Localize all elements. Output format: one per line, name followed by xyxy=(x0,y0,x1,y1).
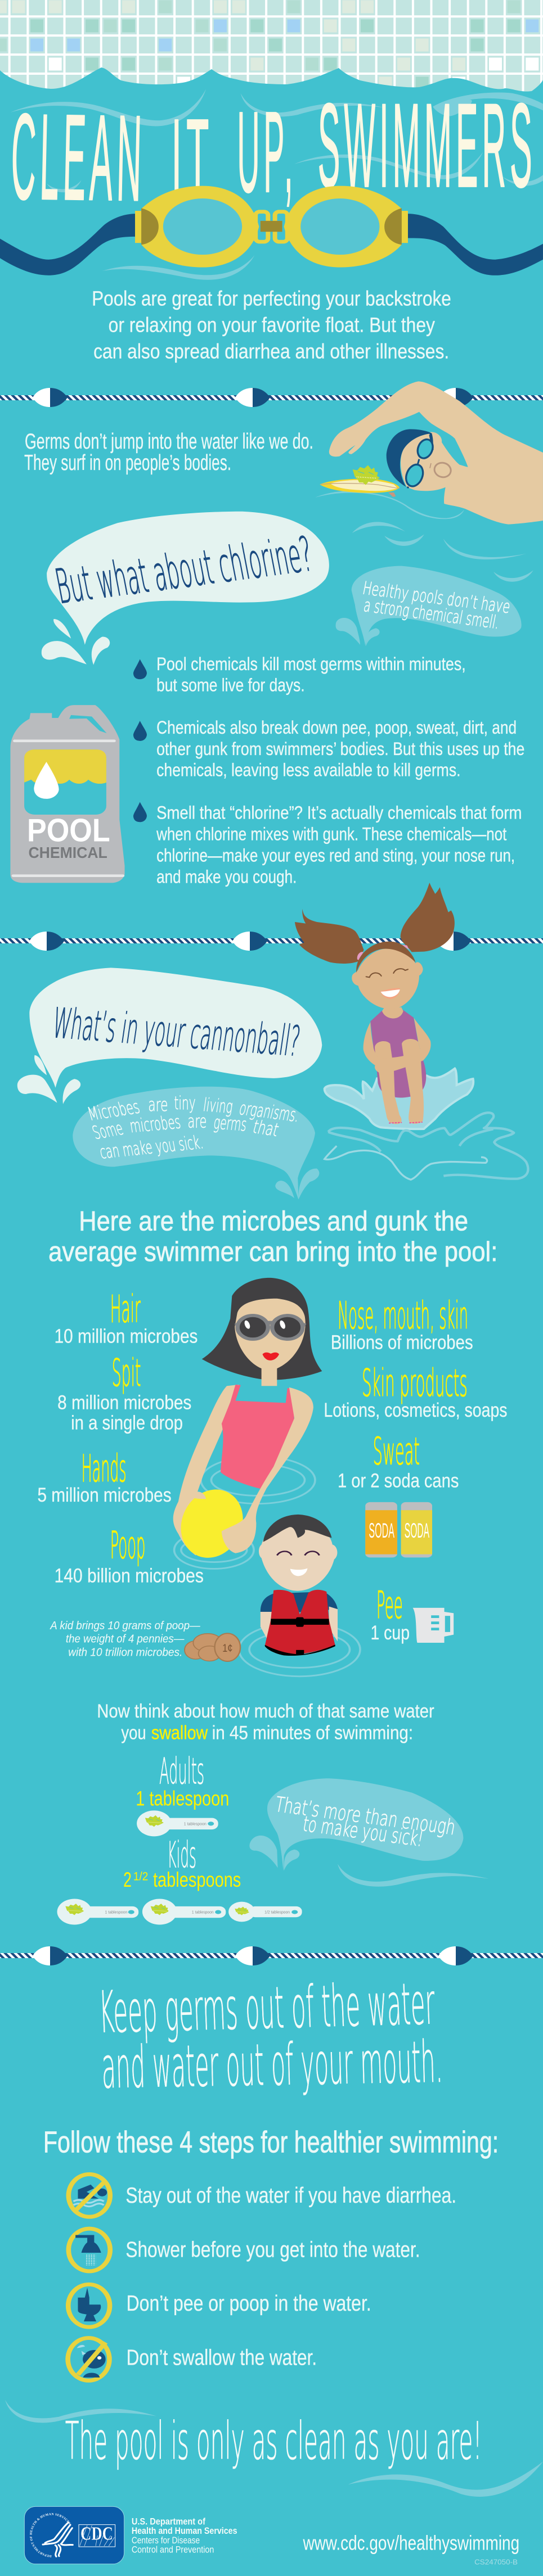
woman with ball xyxy=(173,1278,322,1562)
water surface waves xyxy=(0,67,543,146)
right labels: Sweat xyxy=(373,1430,420,1474)
swallow text: you xyxy=(121,1723,146,1743)
section 6: steps and footer xyxy=(5,2125,543,2566)
small swishes xyxy=(352,522,533,582)
head xyxy=(352,948,423,1009)
swimmer with surfing germ xyxy=(315,381,543,525)
kid tablespoon 1 xyxy=(57,1899,138,1924)
kids amount: Kids xyxy=(167,1834,196,1876)
pool chemical jug: CHEMICAL xyxy=(28,844,107,861)
HHS CDC logo xyxy=(24,2506,125,2565)
swallow text xyxy=(97,1701,434,1743)
left labels: 8 million microbes xyxy=(57,1391,191,1413)
section 5: swallowing xyxy=(57,1701,489,2102)
section 4: microbes and gunk xyxy=(37,1278,508,1676)
kids amount: tablespoons xyxy=(153,1868,241,1891)
measuring cup xyxy=(413,1608,454,1643)
right labels: Pee xyxy=(376,1583,403,1627)
HHS text xyxy=(132,2516,237,2555)
HHS CDC logo: CDC xyxy=(80,2523,113,2544)
kid poop note: the weight of 4 pennies— xyxy=(66,1632,185,1645)
right labels: 1 or 2 soda cans xyxy=(338,1469,459,1492)
pennies xyxy=(185,1633,240,1661)
right labels xyxy=(324,1294,508,1644)
adults amount xyxy=(136,1750,229,1810)
section 3: cannonball xyxy=(17,968,497,1267)
swish xyxy=(338,1864,489,1887)
kid in life jacket xyxy=(259,1515,338,1656)
speech bubble: microbes: can make you sick. xyxy=(98,1132,205,1163)
pool chemical jug: POOL xyxy=(27,813,110,848)
speech bubble: microbes: that xyxy=(250,1117,281,1141)
kid half tablespoon xyxy=(228,1902,302,1922)
left labels: 140 billion microbes xyxy=(55,1564,204,1587)
heading xyxy=(48,1205,497,1267)
speech bubble: microbes: living xyxy=(202,1095,234,1118)
bullet text xyxy=(156,654,524,887)
bullet text: but some live for days. xyxy=(156,675,305,695)
goggles xyxy=(0,186,543,275)
kid tablespoon 2 xyxy=(142,1899,226,1924)
HHS text: Control and Prevention xyxy=(132,2544,214,2555)
HHS text: Centers for Disease xyxy=(132,2535,200,2546)
speech bubble: What's in your cannonball? xyxy=(17,968,322,1104)
swallow text: in 45 minutes of swimming: xyxy=(212,1723,413,1743)
swallow text: swallow xyxy=(151,1723,208,1743)
title: UP, xyxy=(237,88,297,216)
water swishes behind title xyxy=(10,89,543,280)
ripples xyxy=(174,1457,360,1676)
speech bubble: microbes xyxy=(73,1087,319,1199)
tiled pool wall xyxy=(0,0,543,98)
kids amount: 1/2 xyxy=(133,1870,148,1883)
swishes xyxy=(5,2400,543,2497)
speech bubble: microbes: germs xyxy=(212,1112,248,1136)
germs surf text xyxy=(24,430,313,475)
speech bubble: microbes: Microbes xyxy=(86,1096,142,1125)
intro text xyxy=(92,287,451,363)
icon: no swimming with diarrhea xyxy=(69,2174,110,2217)
lane rope 2 xyxy=(0,932,543,951)
icon: don't swallow water xyxy=(68,2338,109,2380)
speech bubble: But what about chlorine? xyxy=(42,512,329,665)
adult tablespoon xyxy=(137,1810,218,1836)
section 4: microbes and gunk: SODA xyxy=(405,1519,429,1543)
pigtails xyxy=(295,909,364,964)
kid tablespoon 2: 1 tablespoon xyxy=(192,1909,214,1914)
speech bubble: microbes: organisms. xyxy=(237,1098,302,1126)
left labels: Hair xyxy=(110,1287,141,1331)
section 2: chlorine xyxy=(10,512,533,887)
soda cans: SODA xyxy=(369,1519,394,1543)
kids amount: 2 xyxy=(123,1868,132,1891)
kid poop note: with 10 trillion microbes. xyxy=(68,1646,182,1658)
left labels: Hands xyxy=(82,1447,127,1491)
speech bubble: more than enough xyxy=(249,1778,463,1871)
HHS text: Health and Human Services xyxy=(132,2525,237,2536)
icon: toilet xyxy=(68,2284,110,2327)
left labels: in a single drop xyxy=(71,1412,183,1434)
keep germs heading xyxy=(98,1971,443,2102)
left labels: Spit xyxy=(112,1352,141,1395)
step 3: Don’t pee or poop in the water. xyxy=(127,2291,371,2316)
document code: CS247050-B xyxy=(474,2559,518,2566)
pennies: 1¢ xyxy=(222,1642,233,1654)
kids amount xyxy=(123,1834,241,1891)
adult tablespoon: 1 tablespoon xyxy=(184,1821,207,1826)
kid tablespoon 1: 1 tablespoon xyxy=(105,1909,128,1914)
kid poop note: A kid brings 10 grams of poop— xyxy=(50,1619,200,1632)
HHS CDC logo: DEPARTMENT OF HEALTH & HUMAN SERVICES USA xyxy=(29,2513,71,2557)
left labels: Poop xyxy=(110,1524,145,1567)
kid half tablespoon: 1/2 tablespoon xyxy=(264,1909,290,1914)
right labels: 1 cup xyxy=(370,1621,410,1644)
speech bubble: healthy pools xyxy=(336,566,522,646)
girl doing a cannonball xyxy=(295,883,528,1179)
lane rope 3 xyxy=(0,1946,543,1965)
bullet drop icons xyxy=(133,659,147,822)
left labels xyxy=(37,1287,204,1587)
step 4: Don’t swallow the water. xyxy=(127,2345,317,2370)
splash xyxy=(325,1069,528,1179)
speech bubble: microbes: are xyxy=(188,1111,207,1132)
HHS text: U.S. Department of xyxy=(132,2516,206,2527)
title: IT xyxy=(172,96,214,222)
adults amount: 1 tablespoon xyxy=(136,1787,229,1810)
speech bubble: microbes: Some xyxy=(90,1118,126,1144)
icon: shower xyxy=(69,2229,110,2271)
bullet text: and make you cough. xyxy=(156,867,297,887)
kid poop note xyxy=(50,1619,200,1658)
germs surf text: They surf in on people’s bodies. xyxy=(24,451,231,475)
speech bubble: microbes: are xyxy=(148,1095,168,1115)
germs surf text: Germs don’t jump into the water like we do. xyxy=(25,430,313,454)
lane rope 1 xyxy=(0,388,543,407)
speech bubble: microbes: microbes xyxy=(128,1111,182,1137)
adults amount: Adults xyxy=(159,1750,204,1792)
left labels: 10 million microbes xyxy=(55,1325,198,1348)
body xyxy=(370,1010,426,1097)
left labels: 5 million microbes xyxy=(37,1484,172,1506)
soda cans xyxy=(365,1502,432,1557)
speech bubble: microbes: tiny xyxy=(174,1093,196,1114)
section 1: title area, drawn in stretched crop units xyxy=(0,79,543,363)
pool chemical jug xyxy=(10,705,125,883)
speech bubble: more than enough: to make you sick! xyxy=(301,1811,425,1851)
